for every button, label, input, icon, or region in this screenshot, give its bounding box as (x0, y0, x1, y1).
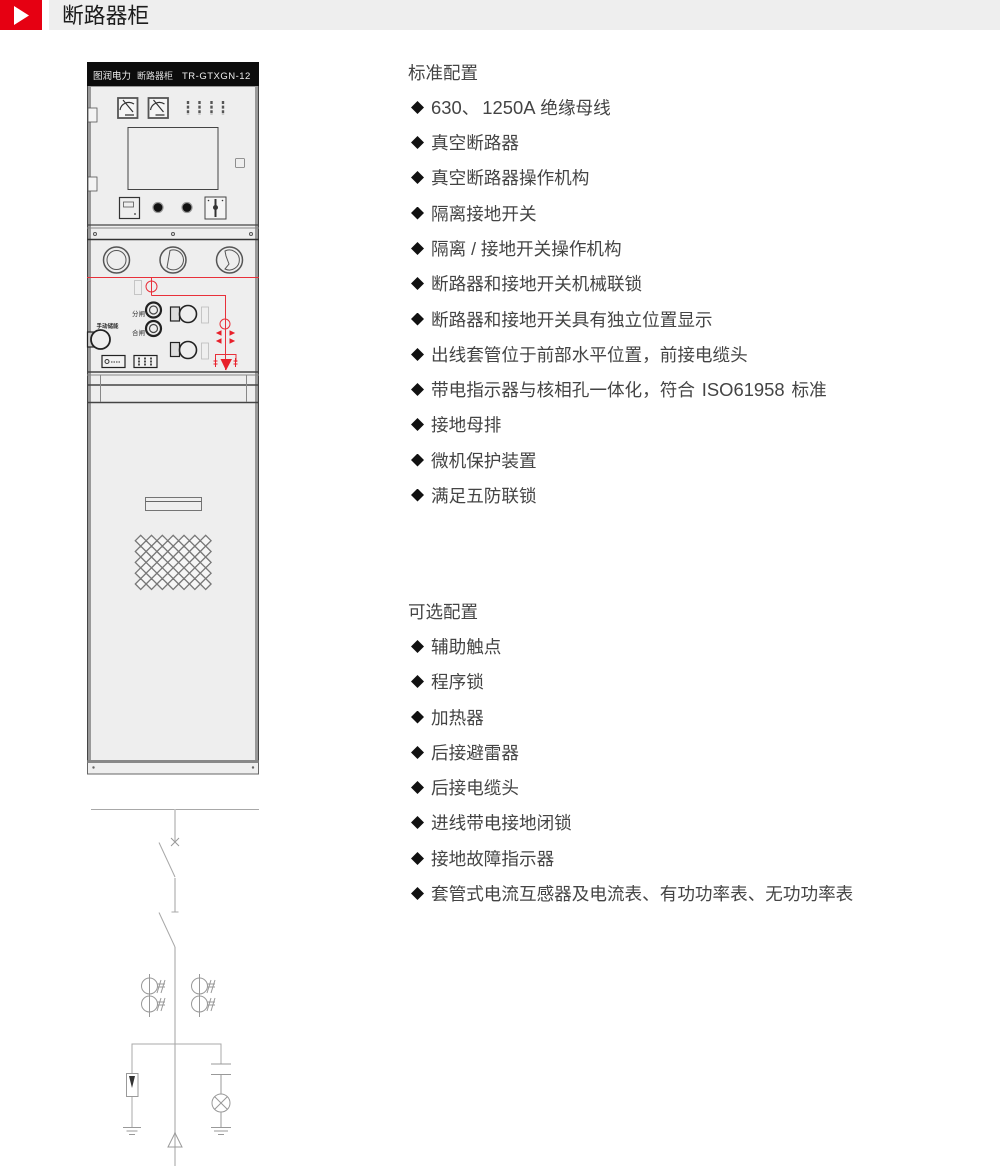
manual charging handle (88, 322, 119, 349)
icon: red play box (0, 0, 42, 30)
branch bus (132, 1044, 221, 1127)
door handle slot (146, 498, 202, 510)
earthing switch (159, 912, 178, 947)
current transformers (142, 974, 215, 1017)
relay screen (128, 128, 218, 190)
list of standard items: 真空断路器 (431, 133, 519, 153)
heading: standard configuration: 标准配置 (408, 63, 478, 83)
list of optional items: 辅助触点 (431, 637, 501, 657)
list of standard items: 接地母排 (431, 415, 501, 435)
list of optional items: 后接电缆头 (431, 778, 519, 798)
list of standard items (411, 97, 827, 506)
cabinet nameplate (87, 62, 259, 86)
door hinges (88, 108, 97, 191)
operating knobs (170, 306, 196, 358)
cable termination triangle (168, 1133, 182, 1147)
fastening strip (94, 232, 252, 236)
disconnector contact (171, 838, 179, 846)
cabinet nameplate: 图润电力 (93, 70, 131, 82)
switchgear cabinet front view (87, 62, 259, 774)
list of optional items: 进线带电接地闭锁 (431, 813, 572, 833)
single line circuit diagram (91, 809, 259, 1166)
list of standard items: 断路器和接地开关具有独立位置显示 (431, 310, 713, 330)
optional configuration list (408, 602, 853, 904)
list of optional items: 加热器 (431, 708, 484, 728)
open and close knobs: 合闸 (132, 328, 145, 337)
list of standard items: 隔离接地开关 (431, 204, 537, 224)
list of standard items: 出线套管位于前部水平位置，前接电缆头 (431, 345, 748, 365)
list of standard items: 真空断路器操作机构 (431, 168, 589, 188)
analog meters (118, 98, 168, 118)
isolating switch blade (159, 842, 175, 877)
standard configuration list (408, 63, 827, 506)
open and close knobs: 分闸 (132, 309, 145, 318)
list of standard items: 带电指示器与核相孔一体化，符合 ISO61958 标准 (431, 379, 827, 400)
bottom small boxes (102, 356, 157, 368)
title: 断路器柜 (62, 3, 149, 28)
heading: optional configuration: 可选配置 (408, 602, 478, 622)
ventilation mesh (135, 535, 211, 589)
small label placards (134, 280, 208, 359)
list of optional items: 程序锁 (431, 672, 484, 692)
lower control row (120, 197, 226, 219)
list of optional items (411, 637, 853, 904)
red mimic bus diagram (87, 277, 259, 370)
list of standard items: 满足五防联锁 (431, 486, 537, 506)
header bar (0, 0, 1000, 30)
open and close knobs (132, 302, 161, 337)
rotary handles (104, 247, 242, 273)
header grey strip (49, 0, 1000, 30)
list of standard items: 630、1250A 绝缘母线 (431, 97, 611, 118)
cabinet plinth (88, 760, 258, 774)
cabinet body (87, 86, 259, 774)
list of standard items: 微机保护装置 (431, 450, 537, 470)
indicator lights (188, 101, 223, 115)
main vertical feeder (174, 809, 176, 1166)
manual charging handle: 手动储能 (96, 322, 119, 330)
list of optional items: 接地故障指示器 (431, 849, 554, 869)
small button (236, 158, 244, 168)
list of standard items: 断路器和接地开关机械联锁 (431, 274, 642, 294)
list of optional items: 套管式电流互感器及电流表、有功功率表、无功功率表 (431, 884, 853, 904)
surge arrester (126, 1074, 138, 1096)
lower transition frames (87, 372, 259, 402)
cabinet nameplate: 断路器柜 (137, 70, 173, 81)
list of standard items: 隔离 / 接地开关操作机构 (431, 239, 622, 259)
ground symbols (123, 1128, 231, 1134)
list of optional items: 后接避雷器 (431, 743, 519, 763)
capacitor and indicator lamp (211, 1064, 231, 1127)
busbar (91, 808, 259, 810)
cabinet nameplate: TR-GTXGN-12 (182, 71, 251, 82)
red mimic symbols (214, 331, 238, 370)
